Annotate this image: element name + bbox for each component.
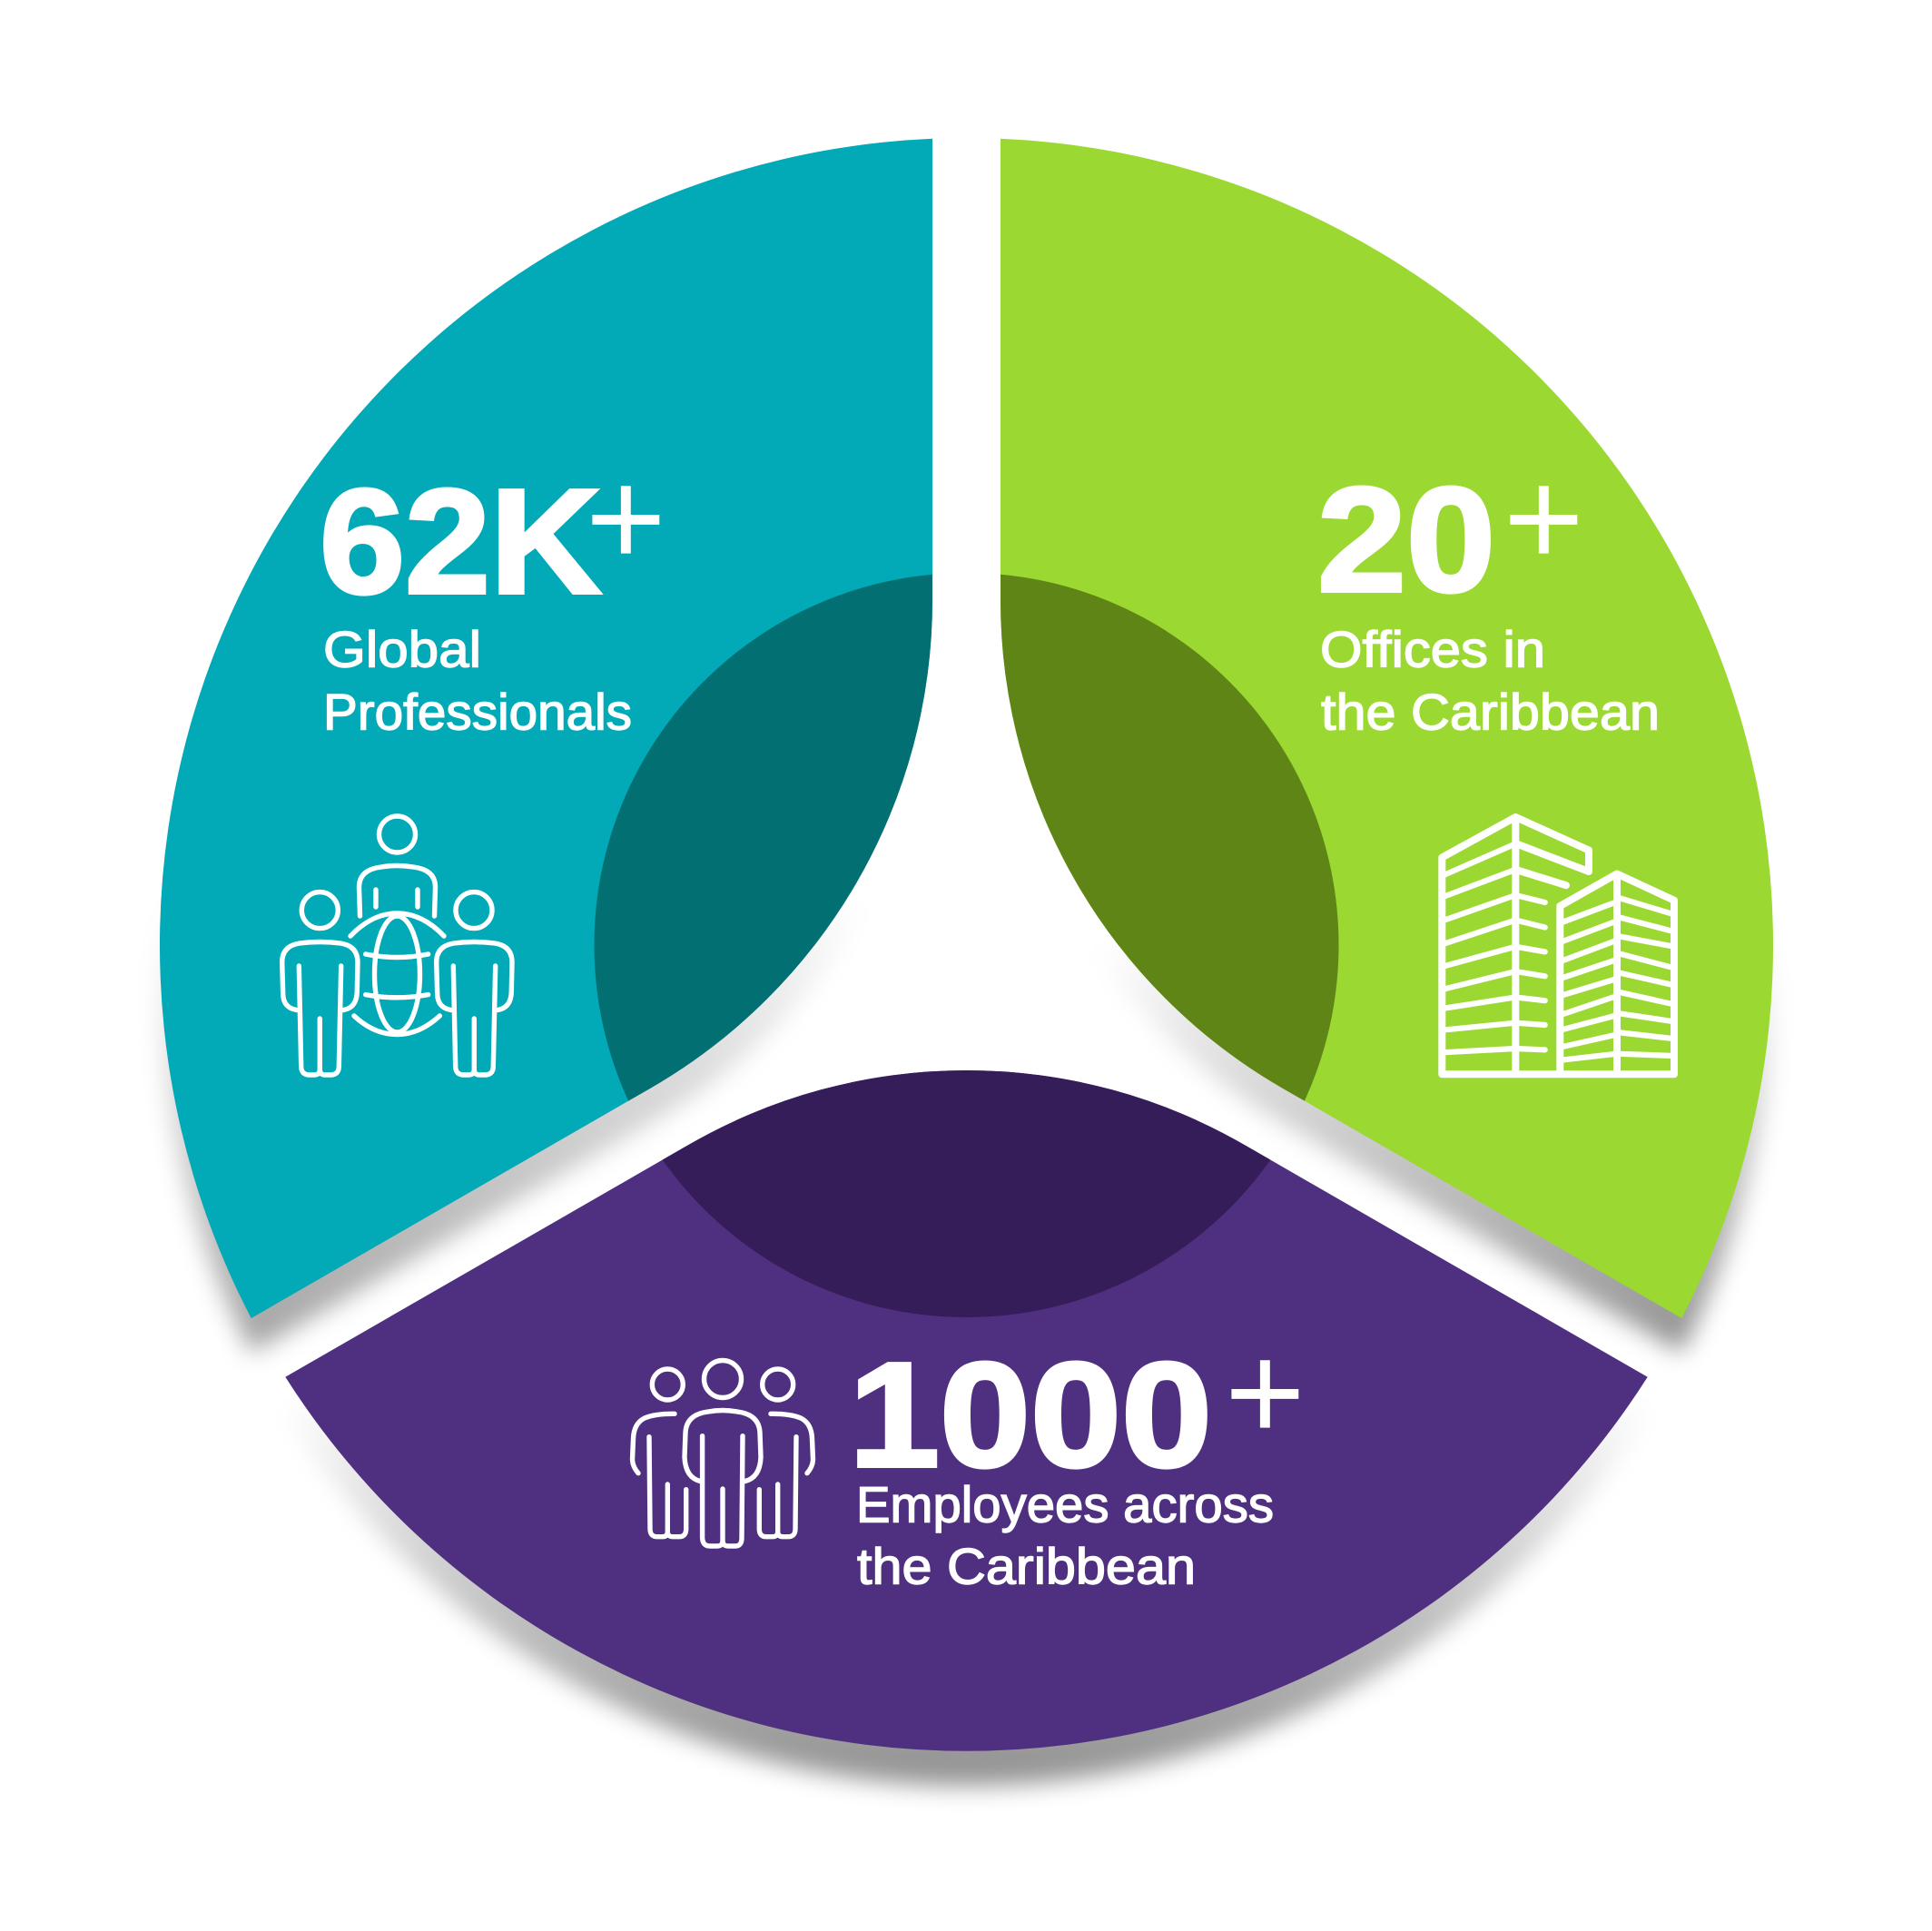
label: employees across the caribbean: the Caribbean	[857, 1538, 1196, 1594]
stat: 1000: 1000	[849, 1332, 1212, 1498]
label: employees across the caribbean	[856, 1476, 1274, 1594]
plus sign: +	[1503, 441, 1584, 596]
panel: offices segment	[594, 139, 1773, 1318]
label: offices in the caribbean: Offices in	[1320, 621, 1545, 677]
segment shadows	[160, 173, 1773, 1786]
stat: 20: 20	[1317, 457, 1495, 623]
dark purple inner circle	[663, 1070, 1271, 1317]
icon: office buildings	[1442, 817, 1674, 1074]
purple segment shape	[285, 1070, 1648, 1751]
green segment shape	[1000, 139, 1773, 1318]
label: employees across the caribbean: Employees across	[856, 1476, 1274, 1532]
dark green inner circle	[1000, 574, 1338, 1101]
label: global professionals: Global	[323, 621, 481, 677]
icon: three employees	[632, 1360, 813, 1546]
label: offices in the caribbean	[1320, 621, 1660, 741]
label: offices in the caribbean: the Caribbean	[1321, 683, 1660, 741]
plus sign: +	[1225, 1315, 1306, 1470]
stat: 62K: 62K	[320, 458, 601, 625]
plus sign: +	[586, 441, 666, 596]
dark teal inner circle	[594, 574, 932, 1101]
label: global professionals: Professionals	[323, 683, 632, 741]
teal segment shape	[160, 139, 932, 1318]
panel: employees segment	[285, 1070, 1648, 1751]
panel: global professionals segment	[160, 139, 1338, 1318]
label: global professionals	[323, 621, 632, 741]
icon: people around globe	[282, 816, 512, 1075]
